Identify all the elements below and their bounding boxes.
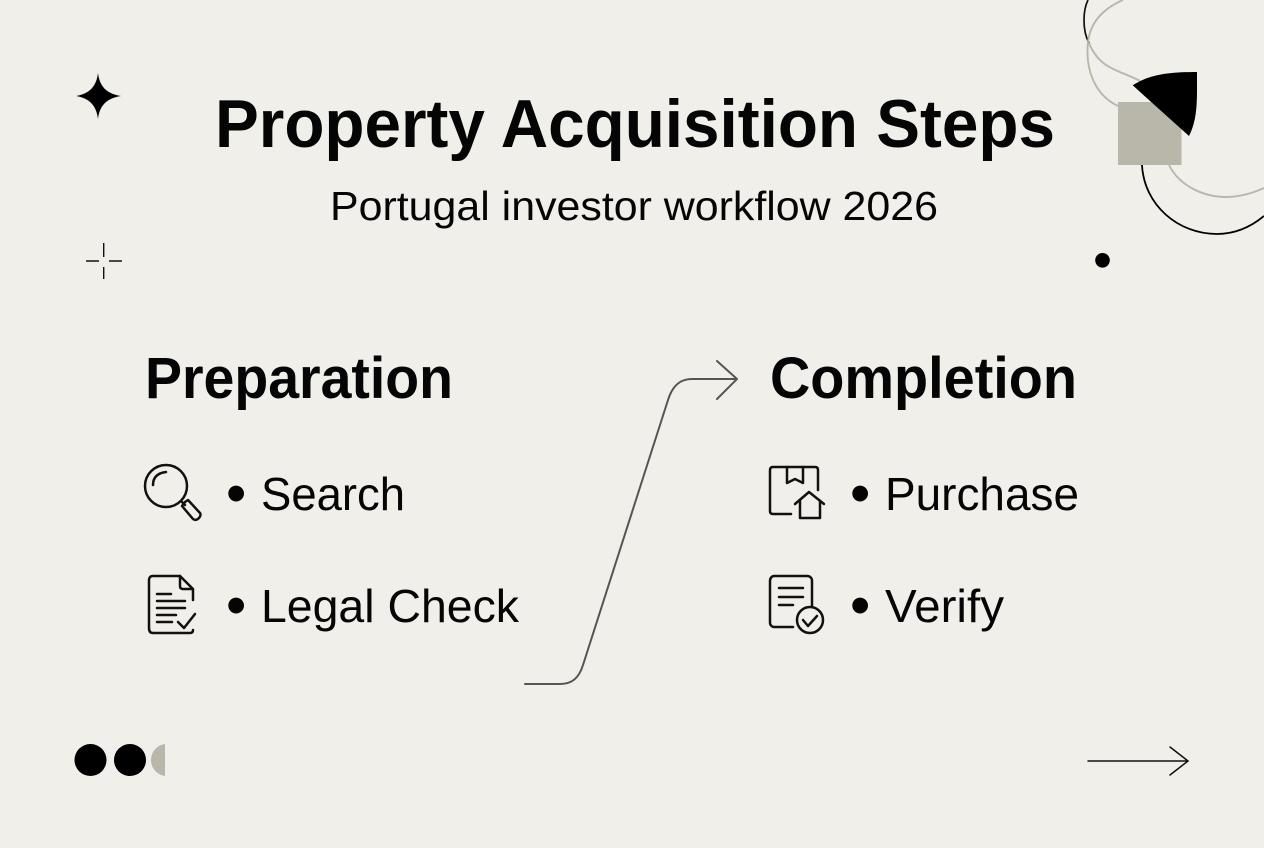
panel: completion: [770, 346, 1079, 638]
title: Property Acquisition Steps: [215, 86, 1055, 162]
item: purchase: •: [850, 461, 870, 526]
pagination dots: [74, 744, 165, 776]
icon: thin crosshair: [86, 243, 122, 279]
item: search: •: [226, 461, 246, 526]
icon: document with check: [149, 576, 195, 633]
item: verify: •: [850, 573, 870, 638]
item: purchase: Purchase: [885, 468, 1079, 520]
icon: document with check circle: [770, 576, 823, 633]
arrow: connector from preparation to completion: [525, 361, 737, 684]
item: legal check: •: [226, 573, 246, 638]
icon: magnifying glass: [145, 465, 200, 520]
item: legal check: Legal Check: [261, 580, 520, 632]
decorative corner composition: [1084, 0, 1264, 234]
icon: four-point star: [76, 73, 121, 119]
heading: completion: Completion: [770, 346, 1077, 411]
item: verify: Verify: [885, 580, 1004, 632]
small black dot: [1095, 253, 1110, 268]
arrow: bottom right: [1088, 747, 1188, 775]
item: search: Search: [261, 468, 405, 520]
panel: preparation: [145, 346, 520, 638]
subtitle: Portugal investor workflow 2026: [330, 183, 938, 229]
heading: preparation: Preparation: [145, 346, 453, 411]
icon: box with house: [770, 467, 824, 518]
